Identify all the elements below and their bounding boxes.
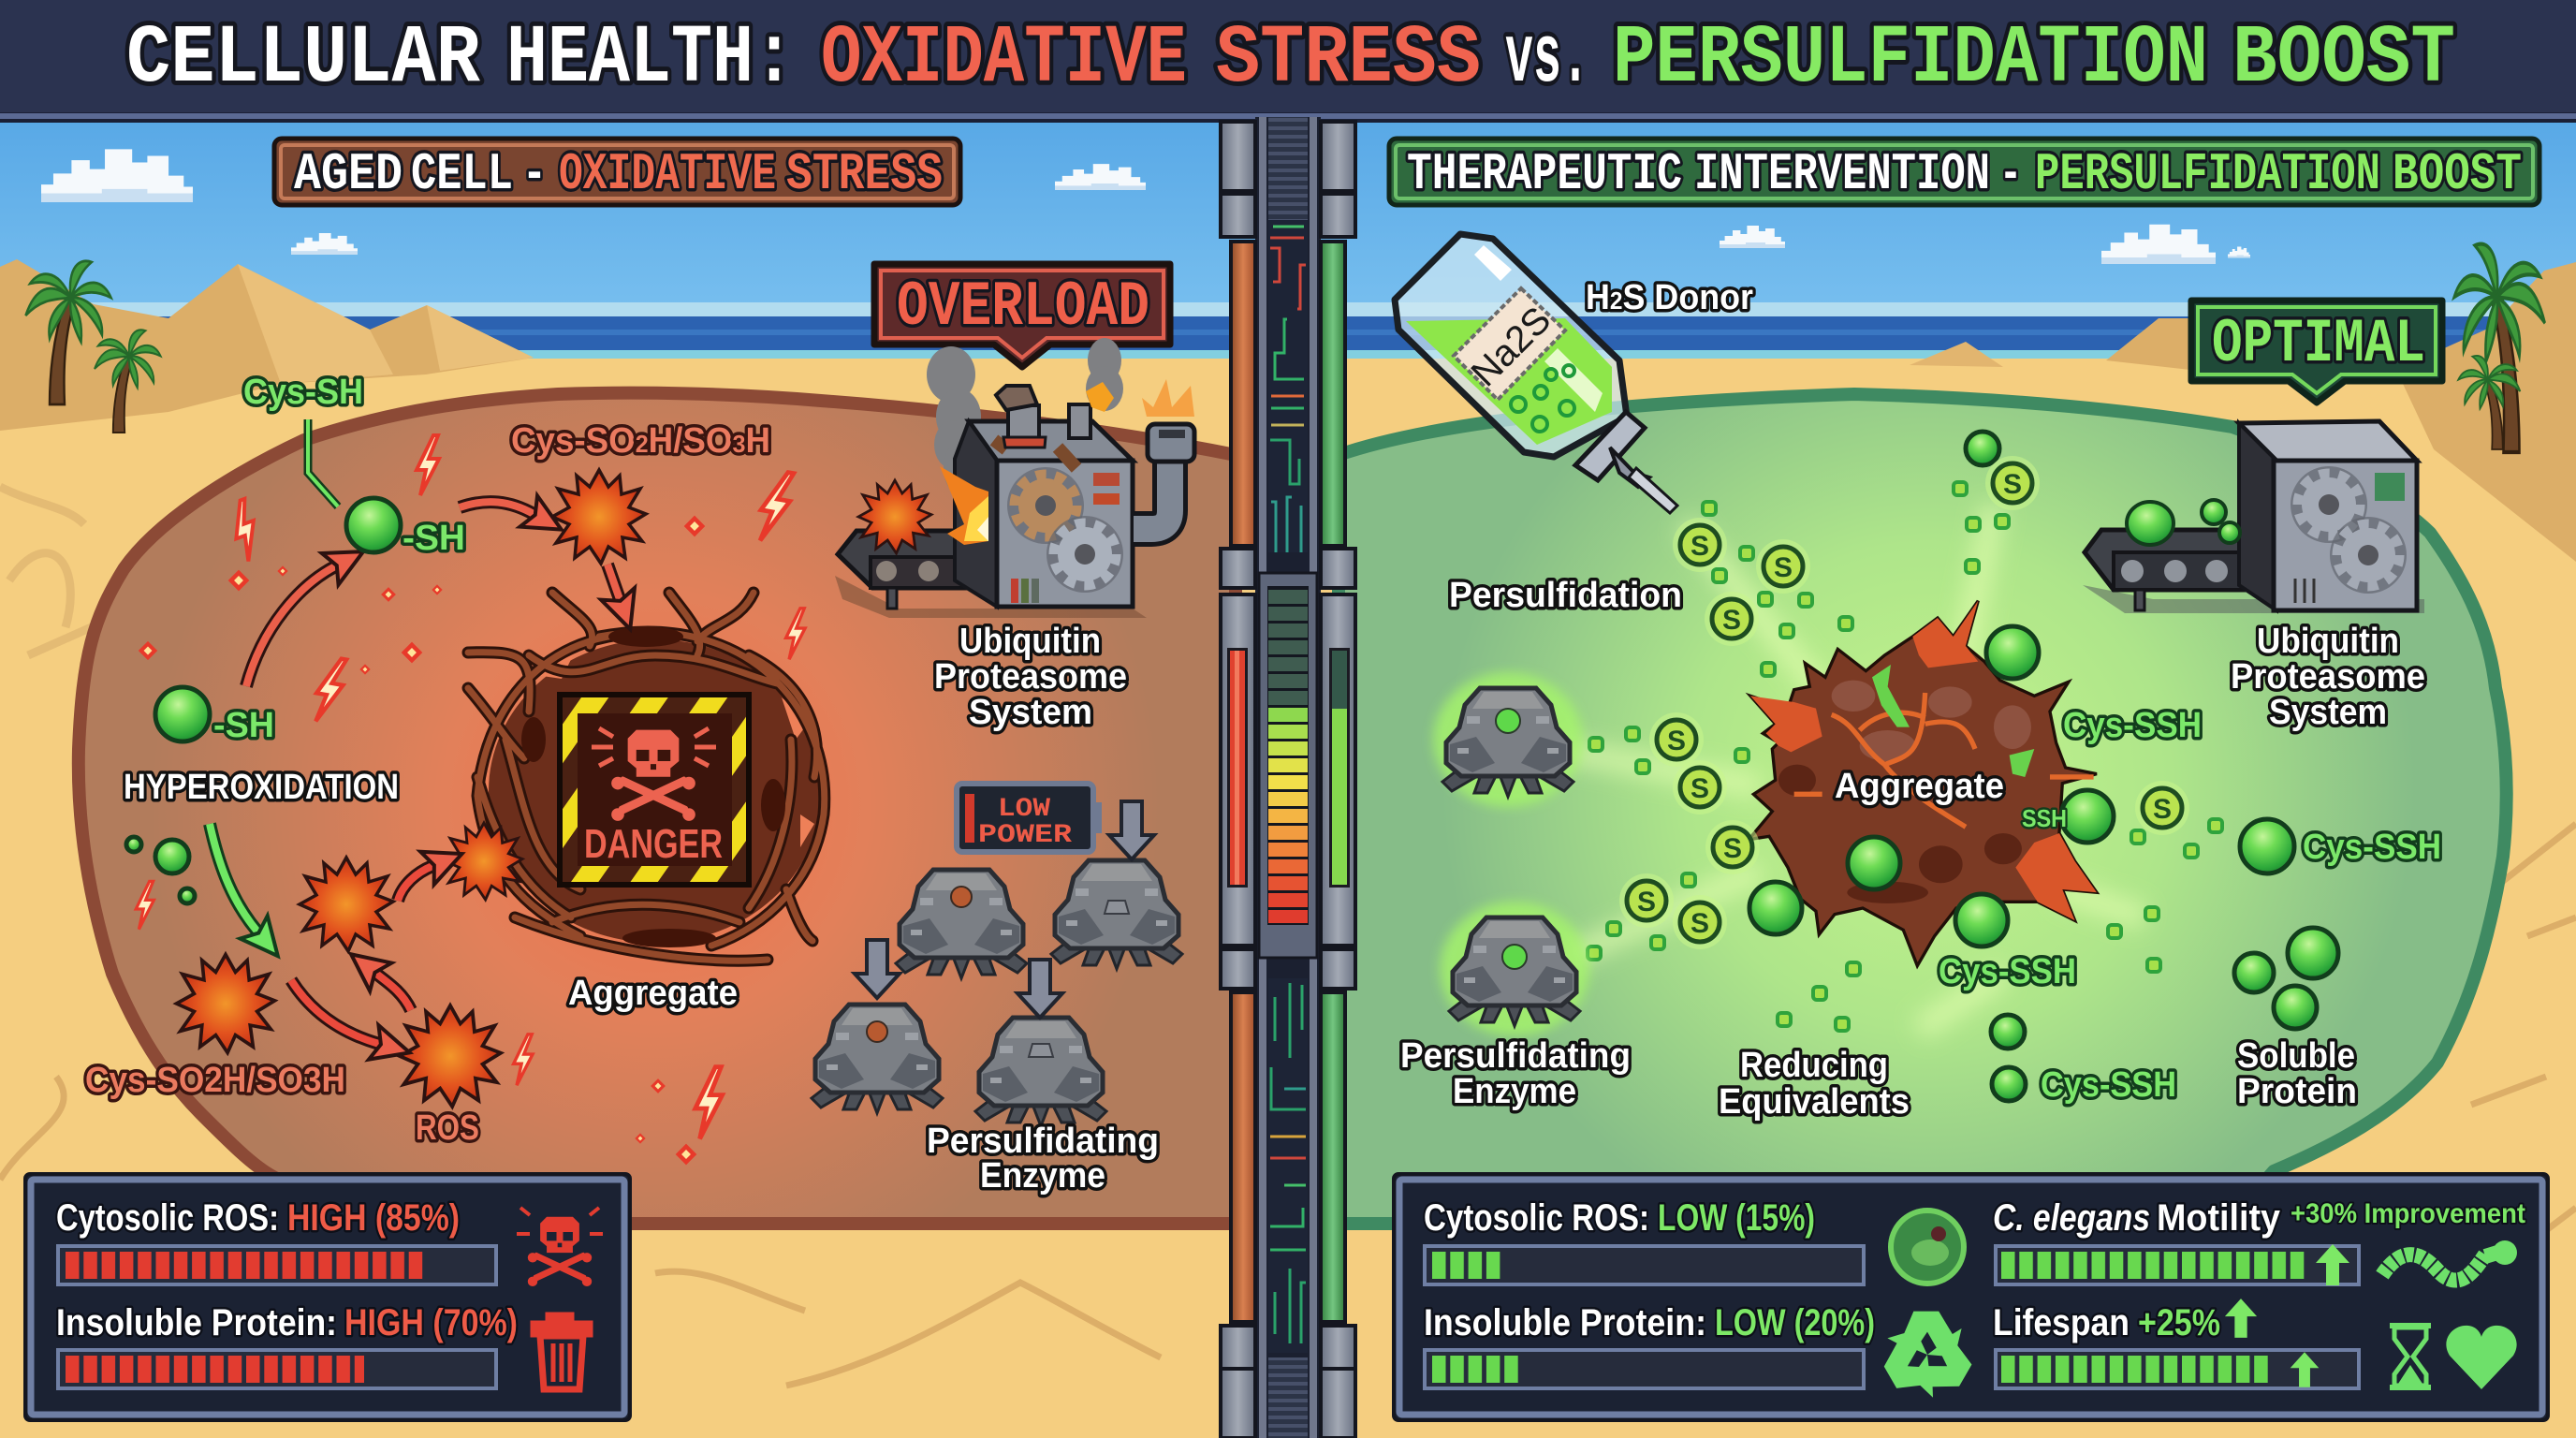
conveyor bbox=[2085, 530, 2275, 590]
pathway labels bbox=[85, 373, 770, 1148]
metric: cytosolic ROS low bbox=[1424, 1197, 1864, 1284]
danger sign bbox=[560, 695, 749, 885]
lightning sparks bbox=[136, 435, 805, 1165]
left banner: OXIDATIVE bbox=[559, 144, 776, 204]
free spheres bbox=[1966, 432, 2338, 1101]
label: reducing equivalents: Equivalents bbox=[1719, 1082, 1910, 1122]
glow rays bbox=[1554, 506, 2144, 1030]
fibre shadows bbox=[521, 626, 785, 947]
label: H2S donor: H2S Donor bbox=[1586, 278, 1753, 317]
callout: overload bbox=[874, 264, 1170, 367]
metric: cytosolic ROS: Cytosolic ROS: bbox=[56, 1197, 279, 1239]
label: aggregate: Aggregate bbox=[568, 974, 738, 1013]
battery: low power: POWER bbox=[978, 821, 1072, 850]
metric: cytosolic ROS bbox=[56, 1197, 496, 1284]
machine body bbox=[969, 421, 1133, 461]
smoke bbox=[927, 338, 1123, 492]
metric: lifespan: Lifespan bbox=[1993, 1302, 2130, 1343]
right banner: INTERVENTION bbox=[1694, 144, 1990, 204]
title: CELLULAR bbox=[126, 13, 480, 106]
label: soluble protein: Protein bbox=[2237, 1072, 2357, 1111]
label: soluble protein: Soluble bbox=[2237, 1036, 2355, 1076]
icon: heart bbox=[2446, 1326, 2517, 1389]
metric: insoluble protein: HIGH (70%) bbox=[344, 1302, 518, 1343]
metric: cytosolic ROS low: LOW (15%) bbox=[1658, 1197, 1815, 1239]
label: reducing equivalents: Reducing bbox=[1740, 1046, 1888, 1085]
left banner: CELL bbox=[411, 144, 513, 204]
right banner: - bbox=[1999, 144, 2022, 204]
metric: motility: Motility bbox=[2157, 1197, 2281, 1239]
flames bbox=[940, 466, 988, 545]
icon: skull bbox=[517, 1208, 603, 1286]
overloaded burst on conveyor bbox=[858, 480, 931, 553]
down arrows bbox=[855, 801, 1154, 1018]
level meter bbox=[1259, 573, 1317, 958]
metric: lifespan bbox=[1993, 1299, 2359, 1388]
labels: right cell: Aggregate bbox=[1835, 767, 2004, 806]
pathway arrows bbox=[210, 419, 620, 1044]
active enzymes bbox=[1433, 672, 1589, 1036]
bottle: Na2S donor bbox=[1395, 234, 1677, 513]
reducing equivalent dots bbox=[1586, 480, 2224, 1033]
green cysteine spheres bbox=[126, 498, 401, 903]
panel: aged cell bbox=[79, 393, 1236, 1224]
gears bbox=[1007, 467, 1123, 593]
labels: right cell: Cys-SSH bbox=[2063, 706, 2202, 745]
title: HEALTH: bbox=[506, 13, 795, 106]
label: reducing equivalents bbox=[1719, 1046, 1910, 1122]
right banner: PERSULFIDATION bbox=[2035, 144, 2380, 204]
right banner bbox=[1389, 139, 2539, 205]
icon: hourglass bbox=[2390, 1326, 2431, 1387]
pipe bbox=[1134, 459, 1170, 529]
label: ubiquitin proteasome system right: Proteasome bbox=[2231, 657, 2425, 697]
metric: insoluble protein: Insoluble Protein: bbox=[56, 1302, 337, 1343]
right banner: THERAPEUTIC bbox=[1407, 144, 1682, 204]
label: persulfidating enzyme right bbox=[1400, 1036, 1631, 1111]
reactive oxygen bursts bbox=[176, 470, 646, 1107]
callout: overload: OVERLOAD bbox=[897, 271, 1149, 344]
title: BOOST bbox=[2232, 13, 2455, 106]
label: ubiquitin proteasome system right: Ubiquitin bbox=[2257, 622, 2399, 661]
pathway labels: HYPEROXIDATION bbox=[124, 768, 399, 807]
callout: optimal: OPTIMAL bbox=[2212, 309, 2425, 379]
aggregate-bound cys-SSH spheres bbox=[1749, 626, 2114, 946]
title bbox=[126, 13, 2455, 106]
left copper pipes bbox=[1231, 242, 1255, 1322]
red gauge bbox=[1227, 648, 1248, 888]
labels: right cell: Cys-SSH bbox=[1939, 952, 2076, 991]
pathway labels: -SH bbox=[213, 706, 274, 745]
metal brackets bbox=[1221, 122, 1355, 1438]
icon: worm bbox=[2382, 1240, 2517, 1281]
icon: cell bbox=[1891, 1211, 1964, 1284]
metric: insoluble protein low: Insoluble Protein: bbox=[1424, 1302, 1706, 1343]
panel: right metrics bbox=[1394, 1174, 2548, 1420]
metric: motility bbox=[1993, 1197, 2525, 1285]
icon: recycle bbox=[1873, 1312, 1979, 1406]
metric: insoluble protein low: LOW (20%) bbox=[1715, 1302, 1875, 1343]
sulfur coins bbox=[1619, 456, 2189, 949]
inactive enzymes bbox=[812, 860, 1182, 1126]
central divider column bbox=[1221, 117, 1355, 1438]
header bar bbox=[0, 0, 2576, 123]
label: ubiquitin proteasome system left: System bbox=[969, 693, 1092, 732]
pathway labels: ROS bbox=[416, 1108, 479, 1148]
label: ubiquitin proteasome system right bbox=[2231, 622, 2425, 732]
left banner bbox=[274, 139, 960, 205]
right green pipes bbox=[1321, 242, 1345, 1322]
bottle: Na2S donor: Na2S bbox=[1463, 299, 1559, 394]
callout: optimal bbox=[2191, 301, 2442, 403]
chimneys bbox=[1008, 405, 1039, 441]
title: PERSULFIDATION bbox=[1613, 13, 2208, 106]
label: ubiquitin proteasome system left: Proteasome bbox=[934, 657, 1127, 697]
ubiquitin proteasome machine: overloaded bbox=[835, 338, 1194, 618]
liquid bubbles bbox=[1511, 365, 1574, 432]
metric: lifespan: +25% bbox=[2138, 1302, 2220, 1343]
label: soluble protein bbox=[2237, 1036, 2357, 1111]
pathway labels: Cys-SO2H/SO3H bbox=[511, 421, 770, 461]
label: persulfidating enzyme left: Enzyme bbox=[980, 1156, 1105, 1196]
battery: low power bbox=[957, 784, 1102, 852]
tangled fibres bbox=[468, 593, 825, 961]
labels: right cell bbox=[1449, 576, 2441, 1105]
metric: insoluble protein bbox=[56, 1302, 518, 1388]
pathway labels: Cys-SH bbox=[243, 373, 363, 412]
label: persulfidating enzyme right: Enzyme bbox=[1453, 1072, 1576, 1111]
label: persulfidating enzyme left: Persulfidating bbox=[927, 1122, 1159, 1161]
labels: right cell: Persulfidation bbox=[1449, 576, 1682, 615]
icon: trash can bbox=[534, 1315, 590, 1389]
labels: right cell: Cys-SSH bbox=[2041, 1065, 2176, 1105]
metric: cytosolic ROS: HIGH (85%) bbox=[287, 1197, 460, 1239]
metric: motility: +30% Improvement bbox=[2291, 1198, 2525, 1229]
conveyor bbox=[838, 531, 992, 588]
balls on conveyor bbox=[2127, 500, 2240, 545]
label: ubiquitin proteasome system left: Ubiquitin bbox=[959, 622, 1101, 661]
circuit traces bbox=[1270, 227, 1306, 1343]
label: ubiquitin proteasome system right: System bbox=[2269, 693, 2387, 732]
right banner: BOOST bbox=[2393, 144, 2522, 204]
labels: right cell: SSH bbox=[2022, 804, 2067, 832]
metric: insoluble protein low bbox=[1424, 1302, 1875, 1388]
ubiquitin proteasome machine: optimal bbox=[2083, 421, 2424, 613]
clouds bbox=[41, 149, 2250, 264]
labels: right cell: Cys-SSH bbox=[2303, 828, 2441, 867]
left banner: STRESS bbox=[786, 144, 943, 204]
title: OXIDATIVE bbox=[821, 13, 1187, 106]
panel: left metrics bbox=[25, 1174, 630, 1420]
title: STRESS bbox=[1216, 13, 1481, 106]
background holes bbox=[477, 650, 814, 922]
pathway labels: -SH bbox=[402, 519, 465, 558]
green gauge bbox=[1329, 648, 1350, 888]
pathway labels: Cys-SO2H/SO3H bbox=[85, 1061, 345, 1100]
label: ubiquitin proteasome system left bbox=[934, 622, 1127, 732]
panel: treated cell bbox=[1339, 394, 2507, 1224]
battery: low power: LOW bbox=[998, 795, 1050, 824]
bottle label bbox=[1454, 288, 1565, 400]
label: persulfidating enzyme left bbox=[927, 1122, 1159, 1196]
title: vs. bbox=[1505, 13, 1589, 106]
aggregate: dissolving bbox=[1749, 601, 2097, 966]
machine bbox=[2239, 421, 2417, 461]
left banner: - bbox=[522, 144, 547, 204]
aggregate tangle with danger sign bbox=[468, 593, 825, 961]
metric: cytosolic ROS low: Cytosolic ROS: bbox=[1424, 1197, 1649, 1239]
left banner: AGED bbox=[294, 144, 402, 204]
palm trees bbox=[25, 244, 2545, 452]
bottle nozzle bbox=[1575, 412, 1645, 480]
label: persulfidating enzyme right: Persulfidating bbox=[1400, 1036, 1631, 1076]
metric: motility: C. elegans bbox=[1993, 1197, 2150, 1239]
danger sign: DANGER bbox=[584, 821, 723, 867]
